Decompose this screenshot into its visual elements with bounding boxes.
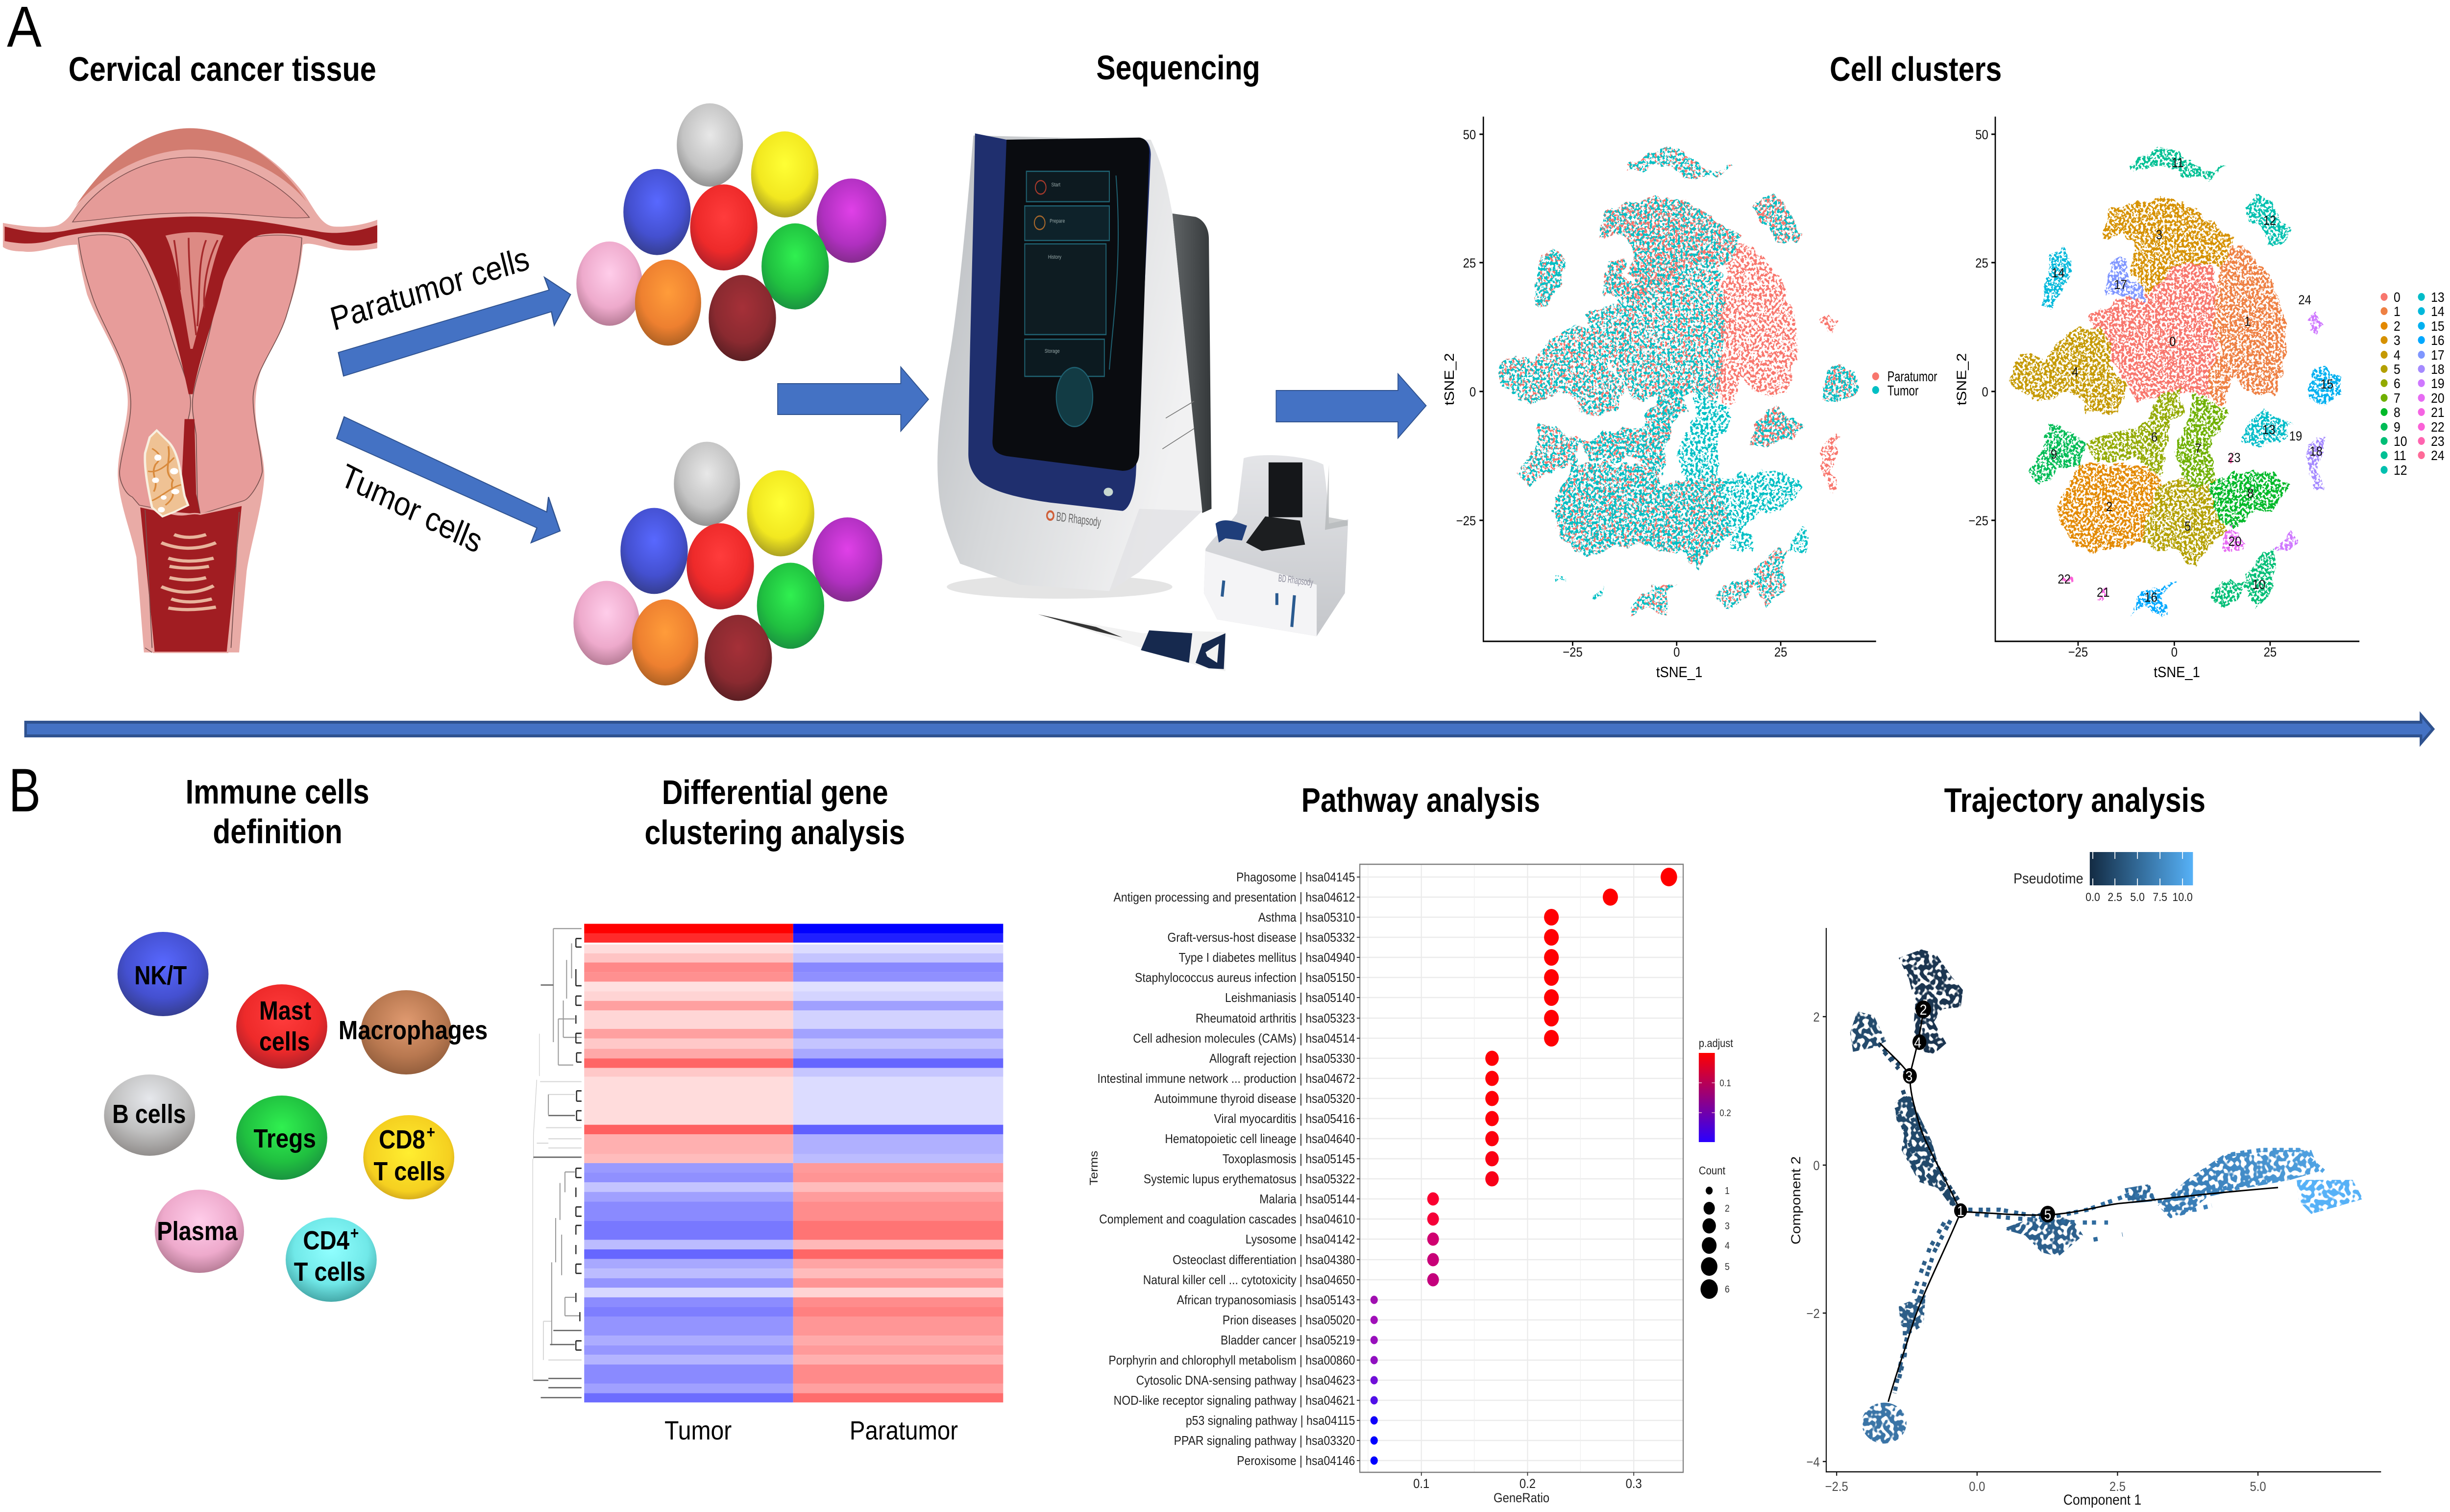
cluster number labels: 13 [2262,423,2276,437]
small scanner unit [1204,455,1348,636]
pathway term labels: NOD-like receptor signaling pathway | hsa04621 [1114,1394,1355,1408]
pathway term labels: African trypanosomiasis | hsa05143 [1177,1293,1355,1307]
axis tick labels: 0 [1470,385,1476,399]
legend: Pseudotime: Pseudotime [2013,871,2083,887]
cluster number labels: 8 [2247,487,2254,501]
cluster number labels: 11 [2172,156,2184,170]
cluster legend: 5 [2394,362,2401,377]
cluster number labels: 3 [2156,228,2162,242]
pathway term labels: Toxoplasmosis | hsa05145 [1223,1152,1355,1166]
row dendrogram [533,928,582,1398]
cluster number labels: 20 [2229,535,2242,549]
axes [1991,117,2359,646]
cluster number labels: 2 [2106,500,2112,514]
label: Paratumor cells: Paratumor cells [327,240,533,338]
cluster number labels: 17 [2114,278,2127,292]
pathway term labels: Viral myocarditis | hsa05416 [1214,1112,1355,1126]
pathway term labels: Phagosome | hsa04145 [1236,871,1355,884]
principal graph line [1880,1009,2278,1402]
legend [1872,368,1937,398]
axis title y: tSNE_2 [1443,353,1457,405]
pathway term labels: Intestinal immune network ... production | hsa04672 [1097,1072,1355,1086]
legend: Pseudotime: 7.5 [2153,890,2167,903]
cell: Plasma: Plasma [157,1216,238,1246]
tick labels: −2 [1806,1307,1820,1321]
heading: Trajectory analysis: Trajectory analysis [1944,781,2205,820]
cluster legend: 7 [2394,390,2401,406]
cell: CD4+ T cells: CD4 [303,1225,350,1255]
axis tick labels: 50 [1975,128,1988,142]
menu labels [1045,182,1065,354]
cluster number labels: 22 [2058,572,2071,586]
heading: Immune cells definition [186,773,369,851]
cell: Tregs [236,1096,327,1180]
cluster number labels: 10 [2253,578,2265,592]
arrow: sequencer to clusters [1276,374,1426,438]
legend: p.adjust: 0.2 [1719,1108,1731,1118]
tick labels: 2.5 [2109,1480,2126,1494]
axis tick labels: 25 [1463,256,1476,270]
legend: p.adjust: p.adjust [1699,1037,1733,1049]
menu labels: Start [1051,182,1060,188]
axis tick labels [1968,128,2277,659]
cluster number labels: 18 [2309,444,2323,459]
plot grid [1360,864,1683,1472]
axis tick labels: 50 [1463,128,1476,142]
legend: Count: 6 [1725,1284,1730,1295]
illustration: sequencing instrument [937,133,1348,671]
arrow: long horizontal divider [25,715,2433,743]
axis tick labels: 25 [2264,645,2277,659]
heading: Cell clusters: Cell clusters [1830,50,2002,89]
branch nodes: 5 [2044,1207,2051,1223]
axes [1479,117,1876,646]
cell: Tregs: Tregs [254,1123,316,1153]
cluster legend: 14 [2431,304,2445,319]
heading: Immune cells definition: Immune cells [186,773,369,811]
legend: Pseudotime: 2.5 [2107,890,2122,903]
pathway term labels: Rheumatoid arthritis | hsa05323 [1196,1012,1355,1025]
cluster number labels: 24 [2298,293,2311,307]
cluster legend: 10 [2394,434,2407,449]
arrow: to paratumor cells [339,277,570,376]
axis tick labels: 25 [1774,645,1787,659]
cluster legend: 24 [2431,448,2445,463]
cell strands along branches [1878,1043,2324,1393]
legend: Pseudotime: 10.0 [2173,890,2193,903]
legend: Count: 5 [1725,1262,1730,1272]
cluster legend: 22 [2431,419,2445,435]
heatmap cells [584,924,1003,1402]
pathway dots [1371,868,1677,1465]
small scanner unit: BD Rhapsody [1278,572,1314,588]
x tick labels [1413,1477,1642,1491]
cell: CD4+ T cells [286,1218,377,1302]
cluster legend: 8 [2394,405,2401,420]
pathway term labels: Osteoclast differentiation | hsa04380 [1173,1253,1355,1267]
instrument brand: BD Rhapsody [1056,509,1102,529]
chart: tSNE by sample [1443,117,1937,681]
cell: CD8+ T cells: T cells [374,1156,445,1186]
cluster legend: 13 [2431,290,2445,305]
cluster legend: 2 [2394,318,2401,334]
branch nodes: 4 [1914,1035,1921,1051]
x tick labels: 0.2 [1519,1477,1536,1491]
cell: CD4+ T cells: T cells [294,1257,366,1287]
cluster legend: 11 [2394,448,2406,463]
cell: Macrophages [339,990,488,1074]
cluster legend: 18 [2431,362,2445,377]
axis title x: tSNE_1 [2154,664,2200,681]
menu labels: History [1048,254,1061,260]
branch nodes: 1 [1957,1203,1964,1219]
legend: Count: 1 [1725,1186,1730,1196]
axes [1823,928,2381,1476]
legend: Count: 3 [1725,1221,1730,1232]
heading: Cervical cancer tissue: Cervical cancer tissue [69,50,376,89]
legend: Count: 2 [1725,1203,1730,1214]
cell: Plasma [155,1190,244,1273]
axis tick labels: 25 [1975,256,1988,270]
legend: Pseudotime [2013,852,2193,903]
cluster number labels: 12 [2263,214,2276,228]
cell sphere group: tumor [573,442,882,701]
pathway term labels: Porphyrin and chlorophyll metabolism | hsa00860 [1108,1354,1355,1367]
cell: CD8+ T cells [363,1115,454,1199]
cluster legend: 17 [2431,347,2445,363]
cell: B cells [104,1074,195,1156]
legend: p.adjust: 0.1 [1719,1078,1731,1088]
tick labels: 0.0 [1969,1480,1985,1494]
scatter points: tumor [1499,147,1857,617]
tick labels: 0 [1813,1159,1820,1173]
axis title y: Terms [1088,1151,1101,1185]
branch nodes [1903,1000,2055,1223]
pathway term labels: Staphylococcus aureus infection | hsa05150 [1135,971,1355,985]
cluster number labels: 6 [2151,430,2157,444]
axis tick labels: 0 [2171,645,2178,659]
cell: Mast cells: Mast [259,996,311,1025]
pathway term labels: Antigen processing and presentation | hsa04612 [1114,891,1355,904]
branch nodes: 2 [1920,1002,1927,1018]
tick labels: −4 [1806,1455,1820,1469]
cluster number labels: 23 [2228,451,2241,465]
cluster number labels: 9 [2051,447,2057,462]
cluster number labels [2051,156,2333,605]
pathway term labels: Allograft rejection | hsa05330 [1209,1052,1355,1066]
legend: Count [1699,1164,1730,1299]
label: Tumor cells: Tumor cells [336,457,488,560]
cluster legend: 15 [2431,318,2445,334]
pathway term labels: Autoimmune thyroid disease | hsa05320 [1154,1092,1355,1106]
pathway term labels: Graft-versus-host disease | hsa05332 [1167,931,1355,945]
legend: p.adjust [1699,1037,1733,1142]
cluster legend: 20 [2431,390,2445,406]
immune cell types [104,932,488,1302]
axis title y: tSNE_2 [1955,353,1969,405]
cluster number labels: 7 [2195,441,2202,456]
legend: Paratumor [1887,368,1937,384]
chart: tSNE by cluster [1955,117,2445,681]
cell: Mast cells [236,984,327,1069]
x tick labels: 0.3 [1626,1477,1642,1491]
axis tick labels: −25 [1456,514,1476,528]
pathway term labels: Bladder cancer | hsa05219 [1221,1334,1355,1347]
cluster legend: 9 [2394,419,2401,435]
cell: B cells: B cells [112,1099,186,1129]
tumor mass [145,430,188,516]
pathway term labels: Type I diabetes mellitus | hsa04940 [1178,951,1355,965]
cluster number labels: 15 [2320,377,2333,391]
cluster number labels: 19 [2289,429,2302,443]
cell: Macrophages: Macrophages [339,1015,488,1045]
menu labels: Prepare [1050,219,1065,224]
cluster number labels: 5 [2184,519,2191,534]
cluster legend [2380,290,2445,478]
axis tick labels: 0 [1982,385,1988,399]
cluster number labels: 21 [2097,585,2110,600]
pathway term labels: Lysosome | hsa04142 [1246,1233,1355,1246]
tick labels: 2 [1813,1010,1820,1024]
axis tick labels: 0 [1673,645,1680,659]
cluster legend: 3 [2394,333,2401,348]
cluster legend: 21 [2431,405,2445,420]
pathway term labels [1097,871,1355,1468]
tick labels: 5.0 [2250,1480,2266,1494]
illustration: uterus and cervix with tumor [3,128,377,653]
scatter points: paratumor [1499,147,1857,617]
panel letter B: B [9,756,41,825]
cell: CD8+ T cells: + [426,1122,435,1141]
cluster legend: 1 [2394,304,2401,319]
cell: CD8+ T cells: CD8 [379,1124,425,1154]
column label: Tumor: Tumor [664,1415,732,1445]
heatmap: differential gene clustering [533,924,1003,1445]
tick labels: −2.5 [1825,1480,1848,1494]
cluster number labels: 16 [2144,590,2157,605]
pathway term labels: Prion diseases | hsa05020 [1223,1314,1355,1327]
instrument screen menu [1025,171,1118,427]
cell clumps [1850,950,2363,1443]
axis title x: tSNE_1 [1656,664,1702,681]
chart: trajectory analysis [1788,852,2381,1508]
pathway term labels: Cytosolic DNA-sensing pathway | hsa04623 [1136,1374,1355,1388]
menu labels: Storage [1045,348,1060,354]
axis tick labels: −25 [2068,645,2088,659]
pathway term labels: Complement and coagulation cascades | hsa04610 [1099,1213,1355,1226]
arrow: to tumor cells [337,417,560,543]
legend: Tumor [1887,383,1918,398]
cluster number labels: 4 [2072,365,2078,379]
axis title x: Component 1 [2063,1492,2141,1508]
pathway term labels: Leishmaniasis | hsa05140 [1225,991,1355,1005]
legend: Pseudotime: 0.0 [2085,890,2100,903]
cluster number labels: 1 [2244,315,2251,329]
legend: Count: Count [1699,1164,1725,1177]
axis title x: GeneRatio [1494,1491,1549,1505]
axis tick labels: −25 [1968,514,1988,528]
cluster points [2010,147,2341,617]
heading: Differential gene clustering analysis: Differential gene [662,774,888,812]
axis tick labels: −25 [1563,645,1583,659]
pathway term labels: Cell adhesion molecules (CAMs) | hsa04514 [1133,1032,1355,1046]
arrow: cells to sequencer [778,367,929,431]
cluster legend: 12 [2394,463,2407,478]
heading: Differential gene clustering analysis: clustering analysis [644,814,905,852]
branch nodes: 3 [1906,1069,1912,1085]
cluster legend: 23 [2431,434,2445,449]
axis title y: Component 2 [1788,1156,1803,1244]
legend: Count: 4 [1725,1241,1730,1251]
cluster legend: 4 [2394,347,2401,363]
cell: Mast cells: cells [259,1026,310,1056]
heading: Sequencing: Sequencing [1096,49,1260,87]
heading: Differential gene clustering analysis [644,774,905,852]
pathway term labels: Asthma | hsa05310 [1258,911,1355,925]
cluster legend: 16 [2431,333,2445,348]
tick labels [1806,1010,2266,1494]
pathway term labels: Systemic lupus erythematosus | hsa05322 [1144,1172,1355,1186]
instrument shadow [947,575,1173,599]
pathway term labels: Hematopoietic cell lineage | hsa04640 [1165,1132,1355,1146]
pathway term labels: PPAR signaling pathway | hsa03320 [1174,1434,1355,1448]
pathway term labels: Malaria | hsa05144 [1259,1193,1355,1206]
legend: Pseudotime: 5.0 [2130,890,2145,903]
cluster legend: 0 [2394,290,2401,305]
chart: pathway dot plot [1088,864,1733,1505]
heading: Pathway analysis: Pathway analysis [1301,781,1540,820]
cell: CD4+ T cells: + [350,1223,359,1242]
cell: NK/T [118,932,209,1016]
heading: Immune cells definition: definition [213,813,343,851]
column label: Paratumor: Paratumor [850,1415,958,1445]
pathway term labels: p53 signaling pathway | hsa04115 [1186,1414,1355,1428]
cell sphere group: paratumor [576,103,886,361]
cluster number labels: 0 [2169,335,2176,349]
x tick labels: 0.1 [1413,1477,1429,1491]
cluster number labels: 14 [2052,266,2065,280]
cluster legend: 19 [2431,376,2445,391]
pathway term labels: Peroxisome | hsa04146 [1237,1454,1355,1468]
pipette [1038,614,1225,671]
cell: NK/T: NK/T [134,960,187,990]
cluster legend: 6 [2394,376,2401,391]
pathway term labels: Natural killer cell ... cytotoxicity | hsa04650 [1143,1273,1355,1287]
axis tick labels [1456,128,1787,659]
